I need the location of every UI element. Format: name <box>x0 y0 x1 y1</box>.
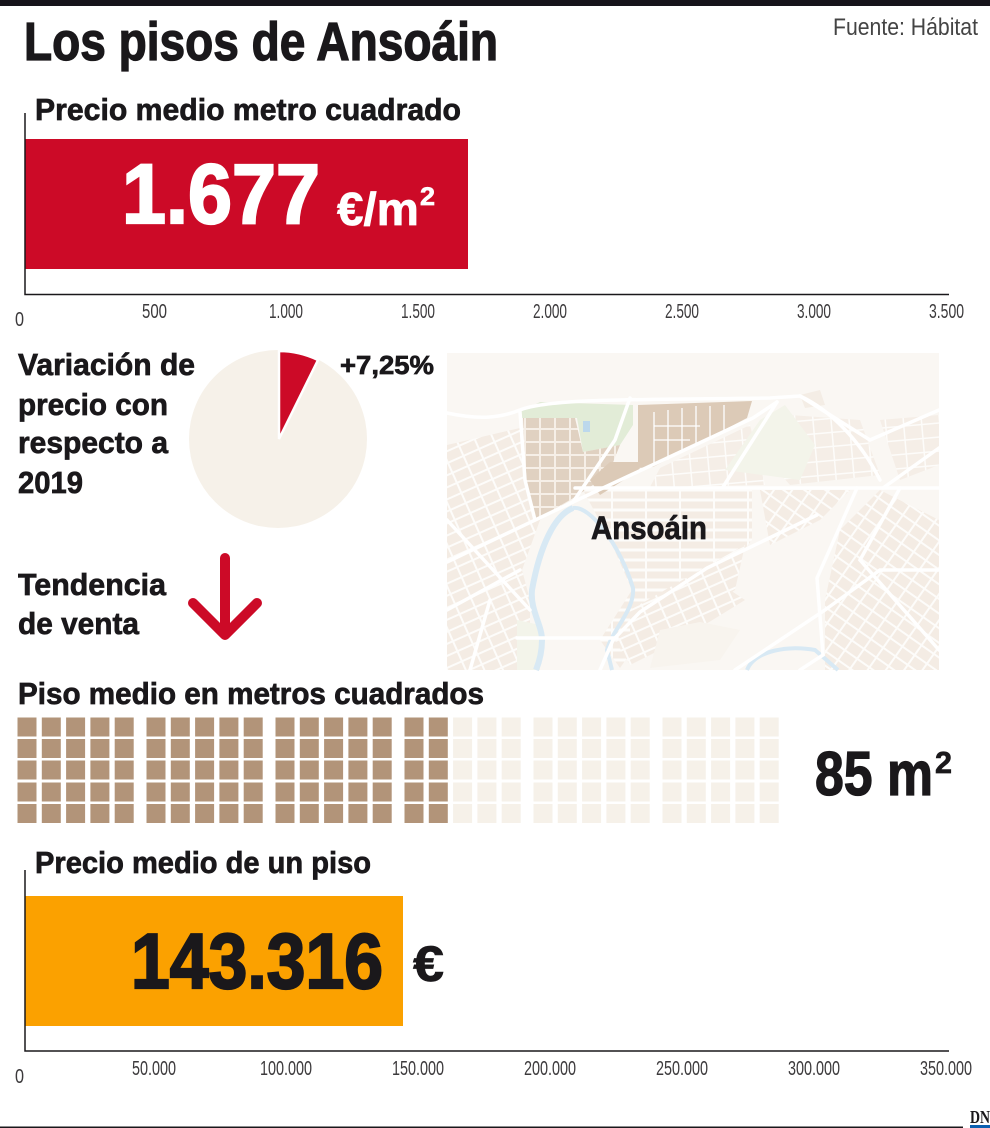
axis labels: 100.000 <box>260 1058 312 1080</box>
pie slice: +7,25% <box>279 351 318 439</box>
heading: sales trend: de venta <box>18 606 140 641</box>
bar: 1.677 euros per square metre <box>25 139 468 269</box>
footer rule <box>0 1126 963 1128</box>
value: +7,25%: +7,25% <box>340 350 434 380</box>
axis labels <box>15 301 964 331</box>
top bar <box>0 0 990 6</box>
value: 143.316: 143.316 <box>131 917 383 1005</box>
map: Ansoáin <box>447 353 939 670</box>
filled squares <box>18 718 448 823</box>
urban blocks <box>447 390 939 670</box>
unit: euro: € <box>413 936 444 992</box>
unit: euros per square metre: €/m <box>337 183 419 235</box>
empty squares <box>453 718 779 823</box>
heading: price per square metre: Precio medio metro cuadrado <box>35 92 461 127</box>
axis labels <box>15 1058 972 1088</box>
axis labels: 500 <box>142 301 167 323</box>
map label: Ansoáin <box>591 510 707 546</box>
axis labels: 0 <box>15 1066 24 1088</box>
heading: price variation: Variación de <box>18 347 195 382</box>
rivers <box>532 508 838 670</box>
axis labels: 250.000 <box>656 1058 708 1080</box>
panel: price per square metre <box>15 92 964 331</box>
value: 1.677: 1.677 <box>122 147 320 241</box>
axis labels: 2.500 <box>665 301 699 323</box>
pie chart: price variation <box>189 350 367 528</box>
heading: price variation: precio con <box>18 387 168 422</box>
heading: sales trend <box>18 567 167 641</box>
green areas <box>517 402 815 670</box>
axis labels: 0 <box>15 309 24 331</box>
heading: average flat price: Precio medio de un piso <box>35 845 371 880</box>
axis labels: 1.000 <box>269 301 303 323</box>
axis labels: 300.000 <box>788 1058 840 1080</box>
axis labels: 2.000 <box>533 301 567 323</box>
heading: sales trend: Tendencia <box>18 567 167 602</box>
highlighted district <box>523 401 752 520</box>
waffle chart: 85 of 150 square metres <box>18 718 779 823</box>
heading: price variation: 2019 <box>18 465 83 500</box>
axis labels: 1.500 <box>401 301 435 323</box>
axis labels: 3.500 <box>929 301 964 323</box>
axis lines <box>25 113 949 294</box>
axis labels: 3.000 <box>797 301 831 323</box>
bar: 143.316 euros <box>25 896 403 1026</box>
value: 85 m2: 85 m <box>815 740 933 809</box>
roads <box>447 396 939 670</box>
axis labels: 150.000 <box>392 1058 444 1080</box>
axis lines <box>25 870 949 1051</box>
heading: price variation: respecto a <box>18 425 169 460</box>
title: Los pisos de Ansoáin <box>24 12 498 72</box>
heading: average flat size: Piso medio en metros cuadrados <box>18 676 484 711</box>
unit: euros per square metre: 2 <box>420 183 435 211</box>
value: 85 m2: 2 <box>935 745 952 780</box>
icon: down arrow <box>193 558 257 635</box>
axis labels: 200.000 <box>524 1058 576 1080</box>
axis labels: 50.000 <box>132 1058 176 1080</box>
panel: average flat price <box>15 845 972 1088</box>
heading: price variation <box>18 347 195 500</box>
